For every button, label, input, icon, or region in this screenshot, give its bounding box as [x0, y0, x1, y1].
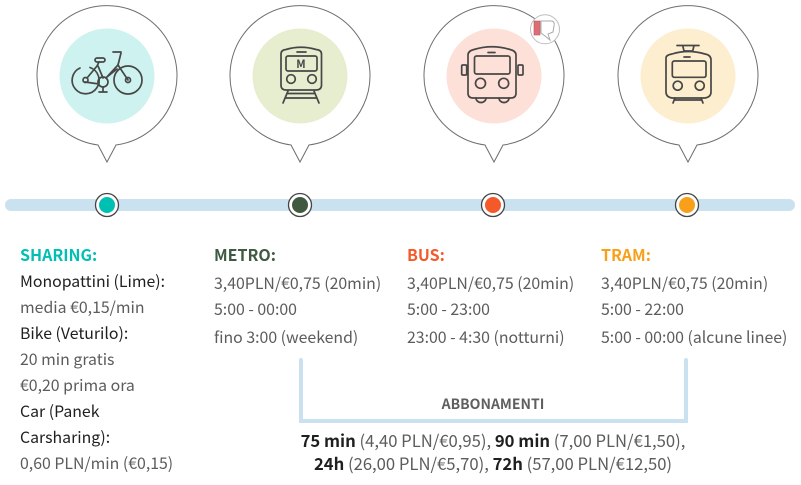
panel: tram bubble	[618, 6, 758, 162]
text block: metro: fino 3:00 (weekend)	[214, 325, 358, 348]
icon: thumbs down badge	[530, 15, 560, 44]
text block: tram: 5:00 - 00:00 (alcune linee)	[601, 325, 787, 348]
text block: abbonamenti prices: 24h (26,00 PLN/€5,70), 72h (57,00 PLN/€12,50)	[314, 451, 672, 475]
text block: sharing	[20, 242, 173, 474]
timeline node: bus	[482, 194, 504, 216]
bracket: abbonamenti	[301, 360, 686, 421]
text block: abbonamenti prices: 75 min (4,40 PLN/€0,95), 90 min (7,00 PLN/€1,50),	[301, 428, 685, 452]
icon: bus	[462, 47, 523, 102]
text block: metro: 3,40PLN/€0,75 (20min)	[214, 271, 381, 294]
text block: bus: 23:00 - 4:30 (notturni)	[407, 325, 565, 348]
text block: sharing: 20 min gratis	[20, 347, 114, 370]
icon: tram	[666, 46, 711, 103]
panel: sharing bubble	[37, 6, 177, 162]
text block: sharing: Monopattini (Lime):	[20, 269, 165, 292]
icon: bicycle	[72, 52, 142, 94]
text block: sharing: Carsharing):	[20, 425, 110, 448]
text block: bus: 3,40PLN/€0,75 (20min)	[407, 271, 574, 294]
panel: metro bubble	[230, 6, 370, 162]
heading: abbonamenti: ABBONAMENTI	[441, 394, 544, 414]
text block: sharing: Car (Panek	[20, 399, 100, 422]
heading: tram: TRAM:	[601, 242, 651, 266]
text block: sharing: 0,60 PLN/min (€0,15)	[20, 451, 173, 474]
text block: metro	[214, 242, 381, 348]
icon: metro train	[281, 47, 322, 103]
text block: sharing: media €0,15/min	[20, 295, 145, 318]
panel: bus bubble	[424, 6, 564, 162]
icon label: M: M	[296, 56, 306, 72]
timeline node: metro	[288, 194, 312, 216]
timeline bar	[5, 199, 795, 211]
text block: bus: 5:00 - 23:00	[407, 297, 490, 320]
text block: bus	[407, 242, 574, 348]
text block: tram: 5:00 - 22:00	[601, 297, 684, 320]
timeline node: tram	[676, 194, 698, 216]
text block: sharing: €0,20 prima ora	[20, 373, 135, 396]
text block: tram: 3,40PLN/€0,75 (20min)	[601, 271, 768, 294]
timeline node: sharing	[96, 194, 118, 216]
heading: sharing: SHARING:	[20, 242, 97, 266]
text block: sharing: Bike (Veturilo):	[20, 321, 128, 344]
text block: tram	[601, 242, 787, 348]
text block: abbonamenti prices	[301, 428, 685, 475]
text block: metro: 5:00 - 00:00	[214, 297, 297, 320]
heading: metro: METRO:	[214, 242, 276, 266]
heading: bus: BUS:	[407, 242, 445, 266]
